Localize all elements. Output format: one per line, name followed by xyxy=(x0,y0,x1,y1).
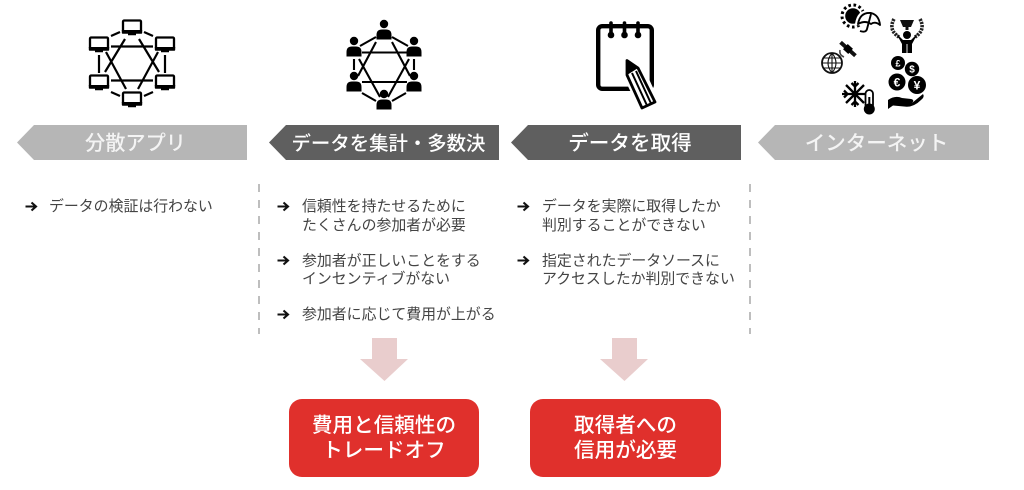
text block: acquisition issues: 指定されたデータソースに xyxy=(542,252,720,270)
callout: 取得者への信用が必要: 信用が必要 xyxy=(574,439,677,462)
text block: aggregation issues: 参加者が正しいことをする xyxy=(302,252,481,270)
text block: aggregation issues: インセンティブがない xyxy=(302,270,450,288)
icon: coins over hand: £ xyxy=(895,58,901,68)
banner: データを取得: データを取得 xyxy=(568,131,692,155)
text block: acquisition issues: アクセスしたか判別できない xyxy=(542,270,735,288)
icon: coins over hand: $ xyxy=(909,64,915,76)
icon: trophy and laurel xyxy=(892,19,922,53)
arrow: down to trade-off xyxy=(360,338,408,381)
callout: 費用と信頼性のトレードオフ: トレードオフ xyxy=(322,439,446,462)
icon: coins over hand: ¥ xyxy=(914,78,921,92)
icon: sun and umbrella xyxy=(842,5,881,32)
callout: 取得者への信用が必要 xyxy=(530,399,721,477)
text block: aggregation issues xyxy=(278,198,496,323)
callout: 費用と信頼性のトレードオフ: 費用と信頼性の xyxy=(312,414,456,437)
callout: 取得者への信用が必要: 取得者への xyxy=(574,414,677,437)
icon: satellite and globe xyxy=(822,40,858,73)
icon: coins over hand xyxy=(888,56,926,109)
text block: acquisition issues xyxy=(518,197,735,288)
icon: snowflake and thermometer xyxy=(842,81,875,114)
text block: aggregation issues: 参加者に応じて費用が上がる xyxy=(302,306,496,323)
banner: データを取得 xyxy=(511,125,741,160)
icon: distributed app network of monitors xyxy=(89,20,175,107)
text block: acquisition issues: データを実際に取得したか xyxy=(542,197,721,215)
icon: data sources from the internet xyxy=(822,5,926,114)
text block: acquisition issues: 判別することができない xyxy=(542,217,706,234)
icon: coins over hand: € xyxy=(894,76,901,90)
banner: 分散アプリ xyxy=(17,125,247,160)
callout: 費用と信頼性のトレードオフ xyxy=(289,399,479,477)
icon: network of people xyxy=(346,20,422,109)
arrow: down to trust xyxy=(600,338,648,381)
text block: 分散アプリ note: データの検証は行わない xyxy=(49,197,213,215)
banner: インターネット xyxy=(758,125,989,160)
banner: データを集計・多数決: データを集計・多数決 xyxy=(292,132,485,155)
banner: データを集計・多数決 xyxy=(269,125,499,160)
text block: aggregation issues: 信頼性を持たせるために xyxy=(302,198,466,215)
banner: 分散アプリ: 分散アプリ xyxy=(85,132,186,155)
icon: notepad with pencil xyxy=(598,23,660,113)
banner: インターネット: インターネット xyxy=(805,132,948,155)
text block: aggregation issues: たくさんの参加者が必要 xyxy=(302,217,466,234)
